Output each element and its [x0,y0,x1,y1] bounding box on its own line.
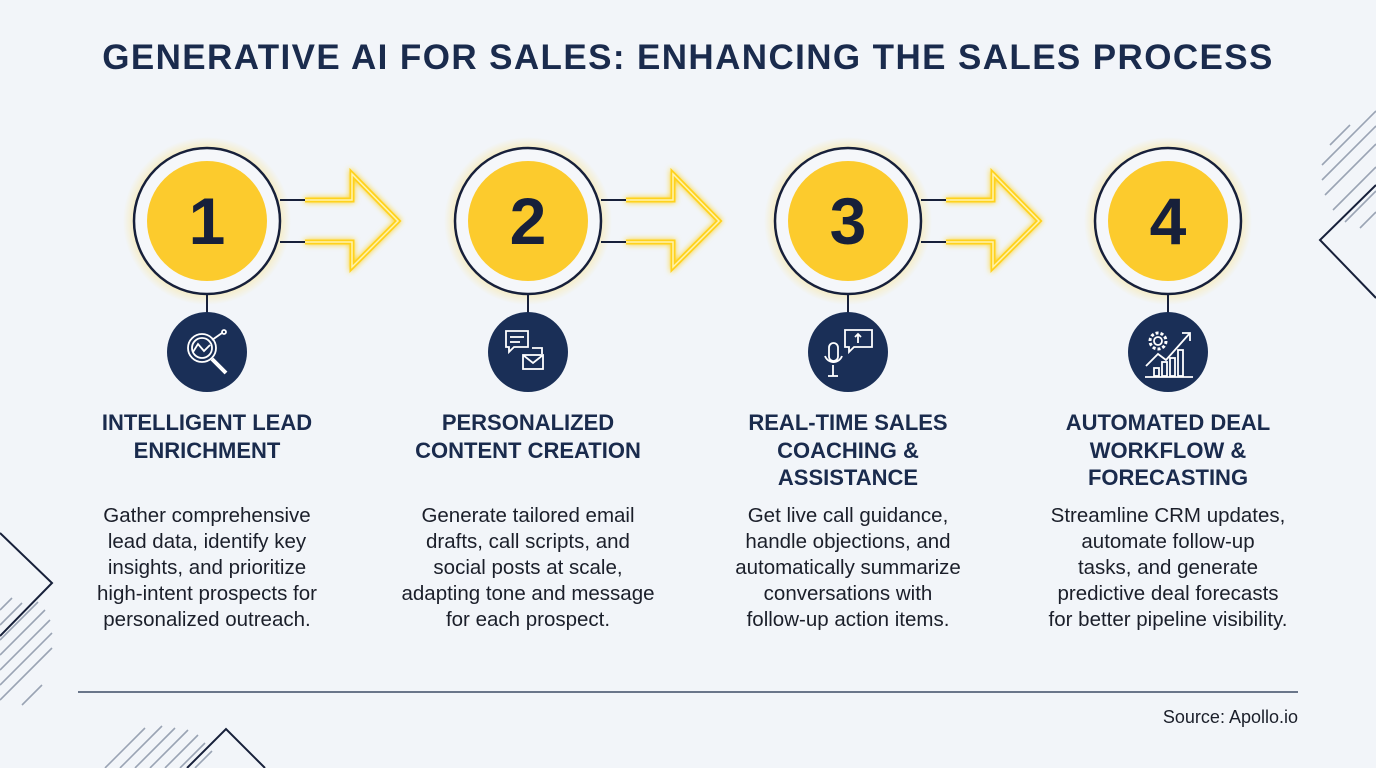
icon: mic and chat [808,312,888,392]
heading 2 [415,410,641,462]
body 4: Streamline CRM updates, [1051,504,1285,527]
step 1 circle [123,137,305,313]
step 3 circle [764,137,946,313]
body 2: adapting tone and message [401,582,655,605]
step graphics [125,139,1250,392]
body 3: handle objections, and [745,530,951,553]
body 4: for better pipeline visibility. [1049,608,1287,631]
body 1: Gather comprehensive [103,504,311,527]
heading 3: COACHING & [777,438,919,462]
body 3: Get live call guidance, [748,504,948,527]
body 4: automate follow-up [1081,530,1255,553]
body 1: high-intent prospects for [97,582,317,605]
body 3 [735,504,961,631]
heading 2: CONTENT CREATION [415,438,641,462]
body 2 [401,504,655,631]
arrow 2 [626,174,719,267]
source note: Source: Apollo.io [1163,707,1298,727]
step 1 circle: 1 [189,184,225,258]
arrow 1 [305,174,398,267]
body 1: insights, and prioritize [108,556,306,579]
icon: chat and mail [488,312,568,392]
step 2 circle [444,137,626,313]
body 2: social posts at scale, [433,556,623,579]
body 1 [97,504,317,631]
body 1: lead data, identify key [108,530,306,553]
heading 3 [748,410,948,490]
title: GENERATIVE AI FOR SALES: ENHANCING THE SALES PROCESS [102,38,1274,77]
icon: magnifier chart [167,312,247,392]
step 4 circle: 4 [1150,184,1187,258]
step 3 circle: 3 [830,184,866,258]
heading 4 [1066,410,1270,490]
step 4 circle [1084,137,1252,313]
body 3: follow-up action items. [747,608,949,631]
heading 1: ENRICHMENT [134,438,280,462]
body 1: personalized outreach. [103,608,311,631]
heading 1: INTELLIGENT LEAD [102,410,312,435]
heading 4: WORKFLOW & [1090,438,1246,462]
heading 3: ASSISTANCE [778,465,918,490]
heading 2: PERSONALIZED [442,410,614,435]
arrow 3 [946,174,1039,267]
body 2: for each prospect. [446,608,610,631]
body 4 [1048,504,1287,631]
heading 1 [102,410,312,462]
heading 3: REAL-TIME SALES [748,410,948,435]
body 3: conversations with [764,582,932,605]
heading 4: AUTOMATED DEAL [1066,410,1270,435]
step 2 circle: 2 [510,184,546,258]
heading 4: FORECASTING [1088,465,1248,490]
body 4: tasks, and generate [1078,556,1258,579]
body 2: drafts, call scripts, and [426,530,630,553]
icon: gear and growth chart [1128,312,1208,392]
body 2: Generate tailored email [421,504,635,527]
body 4: predictive deal forecasts [1057,582,1279,605]
body 3: automatically summarize [735,556,961,579]
